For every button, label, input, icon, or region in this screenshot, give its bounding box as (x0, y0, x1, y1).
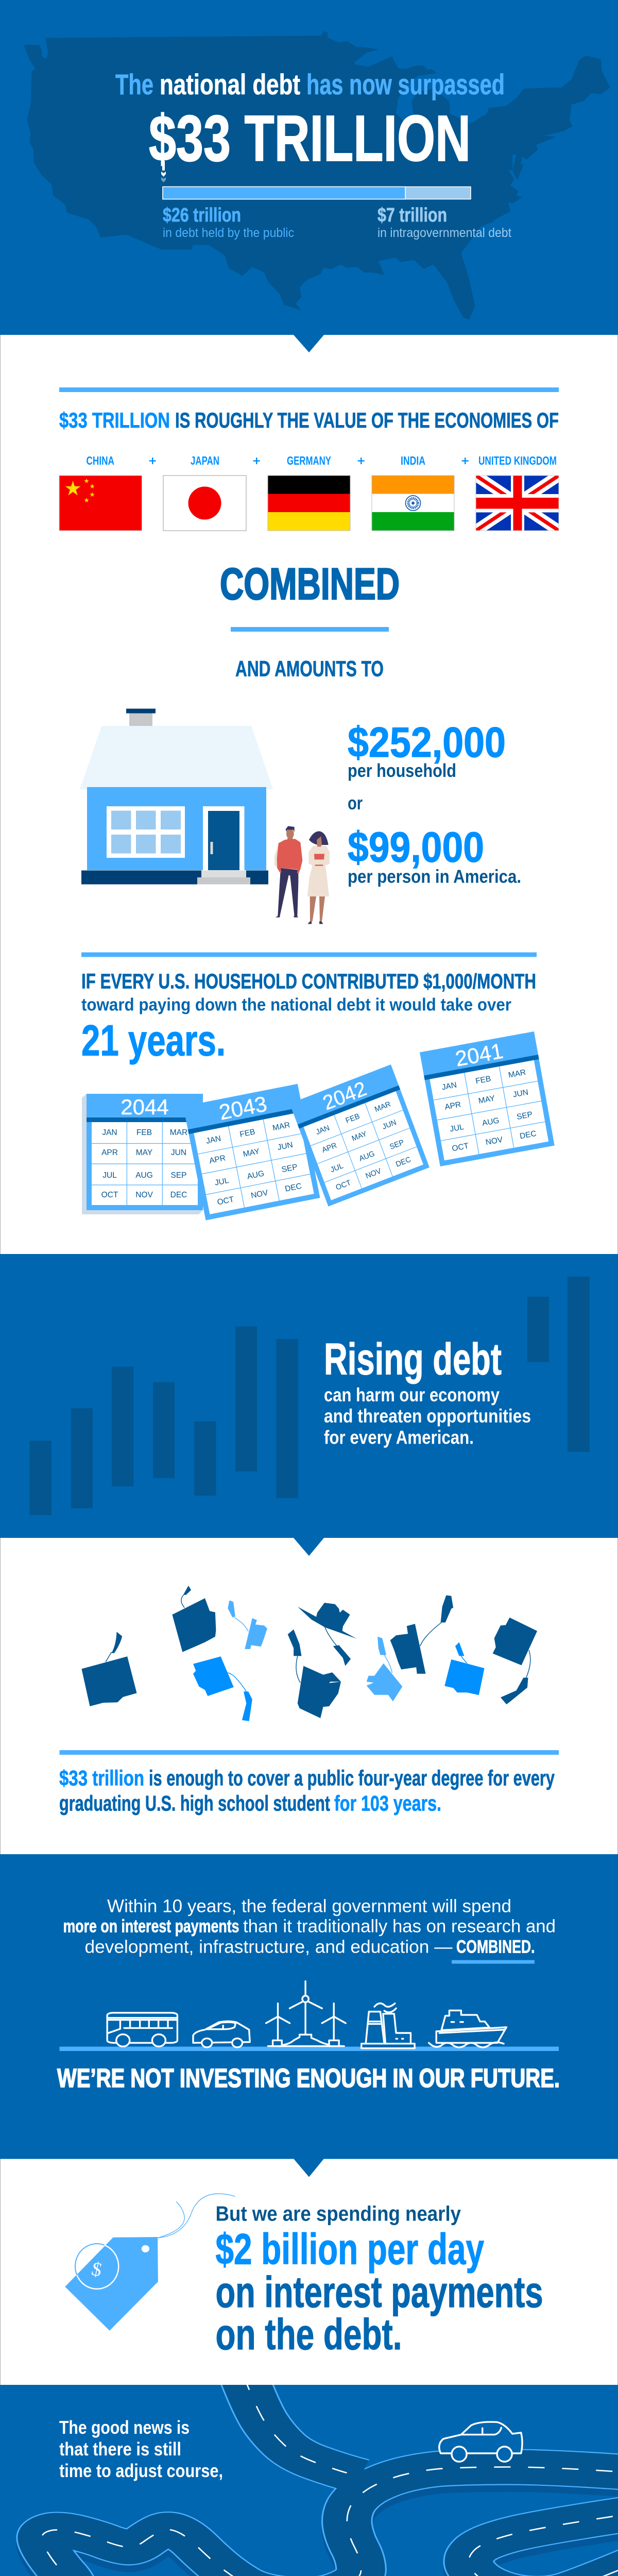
calendar 2044: JUL (102, 1171, 117, 1180)
calendar 2043: APR (209, 1154, 226, 1165)
word: combined: COMBINED (220, 560, 400, 609)
panel: rising debt (0, 1254, 618, 1556)
title line: national debt (160, 68, 300, 100)
body text: Within 10 years, the federal government will spend (107, 1896, 511, 1917)
label: $7 trillion: $7 trillion (377, 205, 447, 226)
calendar 2041: SEP (516, 1110, 533, 1122)
label: $26 trillion (163, 205, 294, 240)
body text (63, 1896, 556, 1957)
calendar 2041: JAN (441, 1080, 457, 1092)
body text: for every American. (324, 1427, 474, 1448)
icon: car (193, 2021, 250, 2047)
panel: graduation caps (59, 1586, 559, 1816)
body text (59, 2417, 223, 2481)
icon: price tag: $ (90, 2258, 104, 2281)
heading: $33 TRILLION (59, 408, 170, 432)
calendar 2043 (183, 1084, 320, 1221)
panel: 21 years of payments (81, 952, 555, 1221)
icon: price tag (65, 2194, 235, 2331)
body text: than it traditionally has on research and (243, 1917, 556, 1936)
title line: The (115, 68, 153, 100)
flag: China (59, 476, 142, 531)
panel: not investing enough (0, 1854, 618, 2177)
calendar 2043: JUN (277, 1141, 294, 1152)
calendar 2044: JUN (171, 1148, 186, 1157)
calendar 2044: AUG (135, 1171, 153, 1180)
icons: bus, car, wind turbines, factory, ship (107, 1981, 506, 2048)
calendar 2042: SEP (388, 1138, 405, 1151)
stat: per person (348, 823, 521, 887)
calendar 2043: DEC (284, 1182, 302, 1194)
calendar 2041: OCT (451, 1142, 470, 1153)
stat continuation (215, 2268, 543, 2359)
calendar 2044: FEB (136, 1128, 152, 1137)
winding road (0, 2375, 618, 2576)
calendar 2044: OCT (101, 1191, 118, 1199)
stat text: for 103 years. (334, 1791, 441, 1816)
panel: header (0, 0, 618, 352)
country labels: JAPAN (191, 454, 219, 467)
calendar 2042: DEC (394, 1156, 412, 1169)
pointer arrow (294, 2159, 324, 2177)
lead-in text: But we are spending nearly (215, 2202, 461, 2226)
calendar 2042: NOV (365, 1167, 383, 1180)
calendar 2042: OCT (335, 1179, 352, 1192)
calendar 2043: MAY (242, 1147, 261, 1159)
calendar 2044: SEP (170, 1171, 187, 1180)
subheading: toward paying down the national debt it would take over (81, 995, 511, 1015)
calendar 2042: 2042 (320, 1077, 370, 1115)
big number: 21 years. (81, 1016, 226, 1064)
panel: good news (0, 2375, 618, 2576)
calendar 2042 (289, 1064, 430, 1207)
calendar 2044: DEC (170, 1191, 187, 1199)
map of the United States (24, 31, 610, 319)
calendar 2043: OCT (216, 1195, 235, 1207)
calendar 2044: JAN (102, 1128, 117, 1137)
connector word: or (348, 792, 363, 814)
calendar 2043: FEB (239, 1127, 256, 1139)
country labels: INDIA (401, 454, 425, 467)
icon: house (80, 709, 273, 884)
calendar 2043: JAN (205, 1134, 222, 1146)
calendar 2042: JUL (330, 1162, 345, 1174)
calendar 2041: NOV (485, 1136, 504, 1147)
label: $26 trillion: $26 trillion (163, 205, 241, 226)
stat text (59, 1766, 555, 1816)
body text: COMBINED. (456, 1937, 535, 1957)
stat: $2 billion per day (215, 2225, 484, 2273)
calendar 2041: JUL (449, 1123, 465, 1134)
title line (115, 68, 505, 100)
country labels: CHINA (87, 454, 114, 467)
calendar 2041: MAY (478, 1094, 496, 1106)
calendar 2044: MAR (170, 1128, 187, 1137)
ground line (60, 2046, 559, 2051)
body text: can harm our economy (324, 1384, 500, 1405)
calendar 2042: APR (321, 1141, 338, 1155)
calendar 2041: 2041 (453, 1039, 505, 1071)
big number: $33 TRILLION (149, 102, 471, 175)
body text: that there is still (59, 2438, 181, 2460)
body text: development, infrastructure, and education — (84, 1937, 452, 1957)
stat: per household (348, 718, 506, 781)
plus signs (149, 457, 469, 464)
calendar 2043: AUG (246, 1169, 265, 1181)
stat text: $33 trillion (59, 1766, 144, 1790)
stat: per household: per household (348, 760, 456, 781)
calendar 2044: MAY (136, 1148, 152, 1157)
panel: interest payments (65, 2194, 543, 2359)
calendar 2041: MAR (508, 1068, 526, 1080)
stat: per person: per person in America. (348, 866, 521, 887)
body text: The good news is (59, 2417, 190, 2438)
stat: per household: $252,000 (348, 718, 506, 766)
heading (59, 408, 559, 432)
icon: factory (362, 2003, 415, 2048)
calendar 2041 (420, 1031, 555, 1166)
heading: Rising debt (324, 1334, 502, 1384)
decorative rising bars (29, 1277, 590, 1515)
calendar 2044: APR (101, 1148, 118, 1157)
calendar 2043: MAR (272, 1121, 291, 1132)
label: $7 trillion: in intragovernmental debt (377, 226, 511, 240)
icon: man and woman (274, 826, 330, 924)
stat continuation: on the debt. (215, 2310, 402, 2359)
calendar 2041: AUG (482, 1116, 500, 1128)
calendar 2044: NOV (135, 1191, 153, 1199)
calendar 2044: 2044 (121, 1095, 169, 1119)
calendar 2042: MAY (351, 1130, 368, 1143)
calendar 2043: SEP (281, 1163, 298, 1174)
calendar 2043: NOV (250, 1188, 269, 1200)
calendar 2042: AUG (358, 1150, 376, 1163)
flag: India (372, 476, 454, 531)
subheading: AND AMOUNTS TO (235, 656, 384, 681)
chevrons from the dollar sign to the bar (161, 161, 166, 182)
country labels (87, 454, 557, 467)
panel: per household and per person (80, 709, 521, 924)
country labels: UNITED KINGDOM (478, 454, 557, 467)
calendar 2042: MAR (373, 1100, 392, 1114)
title line: has now surpassed (306, 68, 505, 100)
country labels: GERMANY (287, 454, 331, 467)
calendar 2041: APR (444, 1100, 461, 1112)
stat text: graduating U.S. high school student (59, 1791, 330, 1816)
icon: ship (429, 2010, 506, 2047)
icon: wind turbines (266, 1981, 346, 2046)
calendar 2041: DEC (519, 1129, 537, 1141)
flag: United Kingdom (476, 476, 559, 531)
calendar 2043: JUL (214, 1176, 230, 1188)
label: $7 trillion (377, 205, 511, 240)
body text: and threaten opportunities (324, 1405, 531, 1427)
calendar 2043: 2043 (217, 1092, 269, 1125)
calendar 2041: JUN (512, 1088, 529, 1099)
icon: car on road (439, 2422, 522, 2462)
pointer arrow (294, 1538, 324, 1556)
body text: time to adjust course, (59, 2460, 223, 2481)
flag: Japan (163, 476, 246, 531)
calendar 2042: JAN (315, 1124, 331, 1137)
flag: Germany (268, 476, 350, 531)
calendar 2042: FEB (345, 1112, 361, 1125)
icon: bus (107, 2013, 177, 2046)
panel: comparison to other economies (59, 387, 559, 681)
icon: tossed graduation caps (81, 1586, 537, 1721)
pointer arrow (294, 335, 324, 352)
calendar 2041: FEB (475, 1074, 492, 1086)
label: $26 trillion: in debt held by the public (163, 226, 294, 240)
stacked bar: public vs intragovernmental debt (163, 187, 471, 199)
calendar 2044 (82, 1094, 203, 1214)
stat: per person: $99,000 (348, 823, 484, 871)
body text (324, 1384, 531, 1448)
body text: more on interest payments (63, 1917, 239, 1936)
calendar 2042: JUN (381, 1118, 398, 1131)
